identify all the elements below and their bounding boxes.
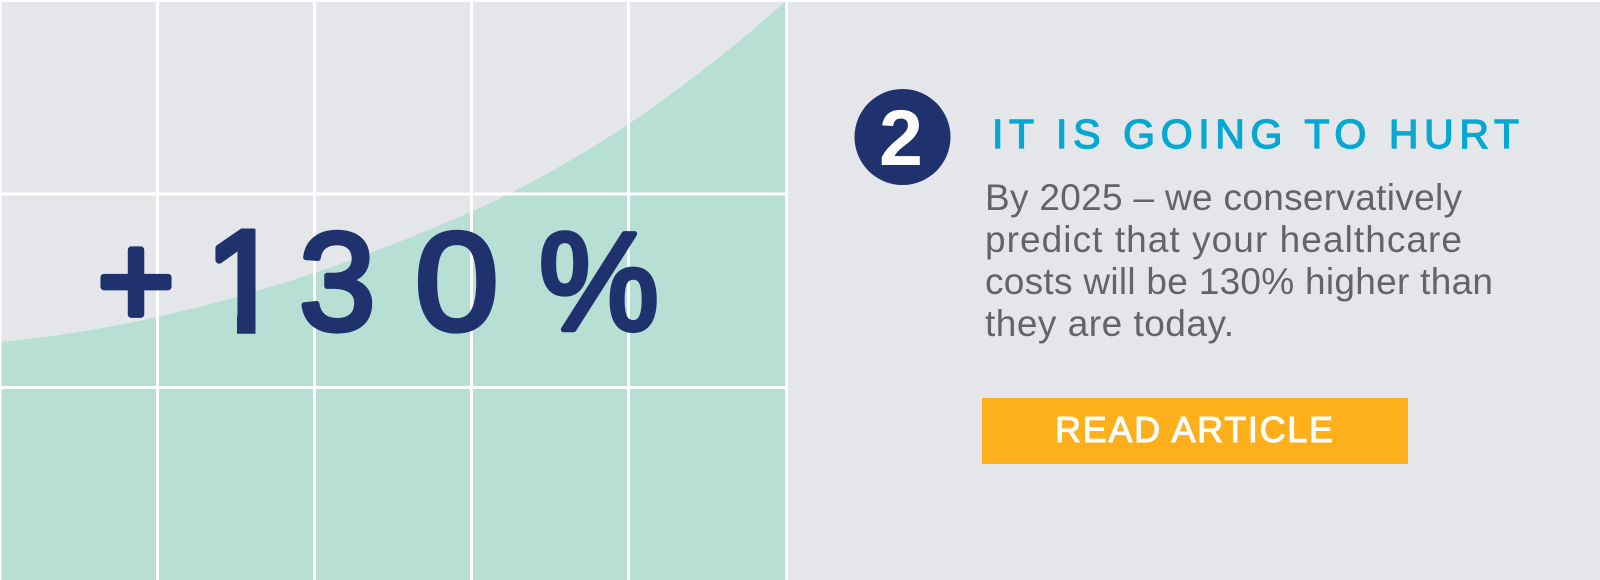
number badge: 2 (879, 93, 923, 182)
area under growth curve (2, 2, 785, 580)
big stat: +130%: 1 (206, 202, 284, 361)
body text: they are today. (985, 303, 1234, 344)
panel: description (788, 2, 1600, 580)
big stat: +130%: 0 (415, 204, 498, 359)
body text: By 2025 – we conservatively (985, 177, 1462, 218)
big stat: +130%: + (98, 207, 175, 354)
big stat: +130% (100, 228, 657, 334)
heading: IT IS GOING TO HURT (992, 111, 1519, 157)
button: read article: READ ARTICLE (1055, 409, 1333, 450)
big stat: +130%: % (539, 205, 659, 360)
button: read article (982, 398, 1408, 464)
body text: costs will be 130% higher than (985, 261, 1493, 302)
panel: chart (0, 0, 785, 580)
big stat: +130%: 3 (299, 205, 376, 360)
body text (985, 177, 1493, 344)
body text: predict that your healthcare (985, 219, 1462, 260)
number badge (854, 89, 950, 185)
